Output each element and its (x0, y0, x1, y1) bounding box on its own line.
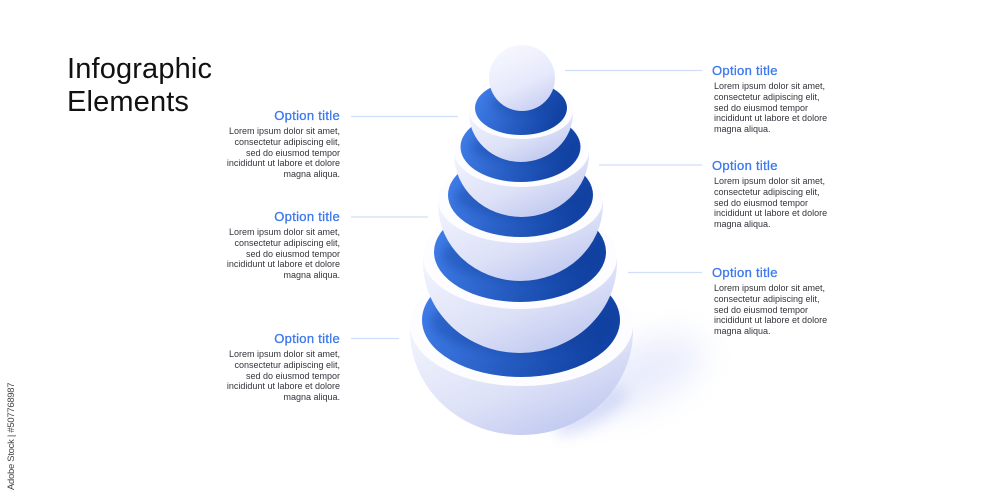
text block: left bottom: sed do eiusmod tempor (246, 371, 340, 381)
text block: right top: consectetur adipiscing elit, (714, 92, 820, 102)
text block: right middle: incididunt ut labore et dolore (714, 208, 827, 218)
text block: right middle: magna aliqua. (714, 219, 771, 229)
bowl 4 (423, 230, 617, 353)
text block: right bottom: Lorem ipsum dolor sit amet, (714, 283, 825, 293)
text block: right top: Option title (712, 63, 778, 78)
title: Infographic (67, 53, 212, 85)
text block: left top: Option title (274, 108, 340, 123)
connector line: top right (565, 70, 702, 72)
text block: right top: incididunt ut labore et dolore (714, 113, 827, 123)
connector line: top left (351, 116, 458, 118)
text block: left bottom: magna aliqua. (283, 392, 340, 402)
text block: right middle: Option title (712, 158, 778, 173)
text block: right middle: consectetur adipiscing elit, (714, 187, 820, 197)
pyramid illustration of stacked bowls (351, 45, 702, 440)
text block: left top: consectetur adipiscing elit, (234, 137, 340, 147)
text block: left middle: Lorem ipsum dolor sit amet, (229, 227, 340, 237)
connector line: middle right (599, 164, 702, 166)
side credit text: Adobe Stock | #507768987 (6, 383, 17, 490)
text block: right bottom (712, 265, 827, 336)
title (67, 53, 212, 118)
text block: right top: magna aliqua. (714, 124, 771, 134)
text block: right top: Lorem ipsum dolor sit amet, (714, 81, 825, 91)
text block: left top (227, 108, 340, 179)
text block: left top: sed do eiusmod tempor (246, 148, 340, 158)
text block: right bottom: incididunt ut labore et dolore (714, 315, 827, 325)
text block: left top: incididunt ut labore et dolore (227, 158, 340, 168)
ground shadow (549, 321, 713, 443)
text block: right top: sed do eiusmod tempor (714, 103, 808, 113)
text block: left bottom: Lorem ipsum dolor sit amet, (229, 349, 340, 359)
text block: right bottom: consectetur adipiscing elit, (714, 294, 820, 304)
text block: left bottom: incididunt ut labore et dolore (227, 381, 340, 391)
bowl 3 (438, 174, 603, 281)
text block: left middle: Option title (274, 209, 340, 224)
text block: left top: Lorem ipsum dolor sit amet, (229, 126, 340, 136)
connector line: middle left (351, 216, 428, 218)
text block: left bottom: Option title (274, 331, 340, 346)
text block: left middle: incididunt ut labore et dolore (227, 259, 340, 269)
text block: right bottom: sed do eiusmod tempor (714, 305, 808, 315)
text block: right bottom: Option title (712, 265, 778, 280)
text block: left middle: consectetur adipiscing elit, (234, 238, 340, 248)
text block: left top: magna aliqua. (283, 169, 340, 179)
text block: right middle: sed do eiusmod tempor (714, 198, 808, 208)
sphere on top (489, 45, 555, 111)
text block: right top (712, 63, 827, 134)
text block: left middle: sed do eiusmod tempor (246, 249, 340, 259)
bowl 2 (454, 127, 589, 217)
text block: left bottom (227, 331, 340, 402)
text block: left middle: magna aliqua. (283, 270, 340, 280)
text block: right middle (712, 158, 827, 229)
text block: left middle (227, 209, 340, 280)
connector line: bottom left (351, 338, 399, 340)
connector line: bottom right (628, 272, 702, 274)
bowl 5 (bottom) (410, 295, 633, 435)
text block: right middle: Lorem ipsum dolor sit amet, (714, 176, 825, 186)
text block: right bottom: magna aliqua. (714, 326, 771, 336)
bowl 1 (top) (469, 81, 573, 162)
title: Elements (67, 86, 189, 118)
text block: left bottom: consectetur adipiscing elit, (234, 360, 340, 370)
